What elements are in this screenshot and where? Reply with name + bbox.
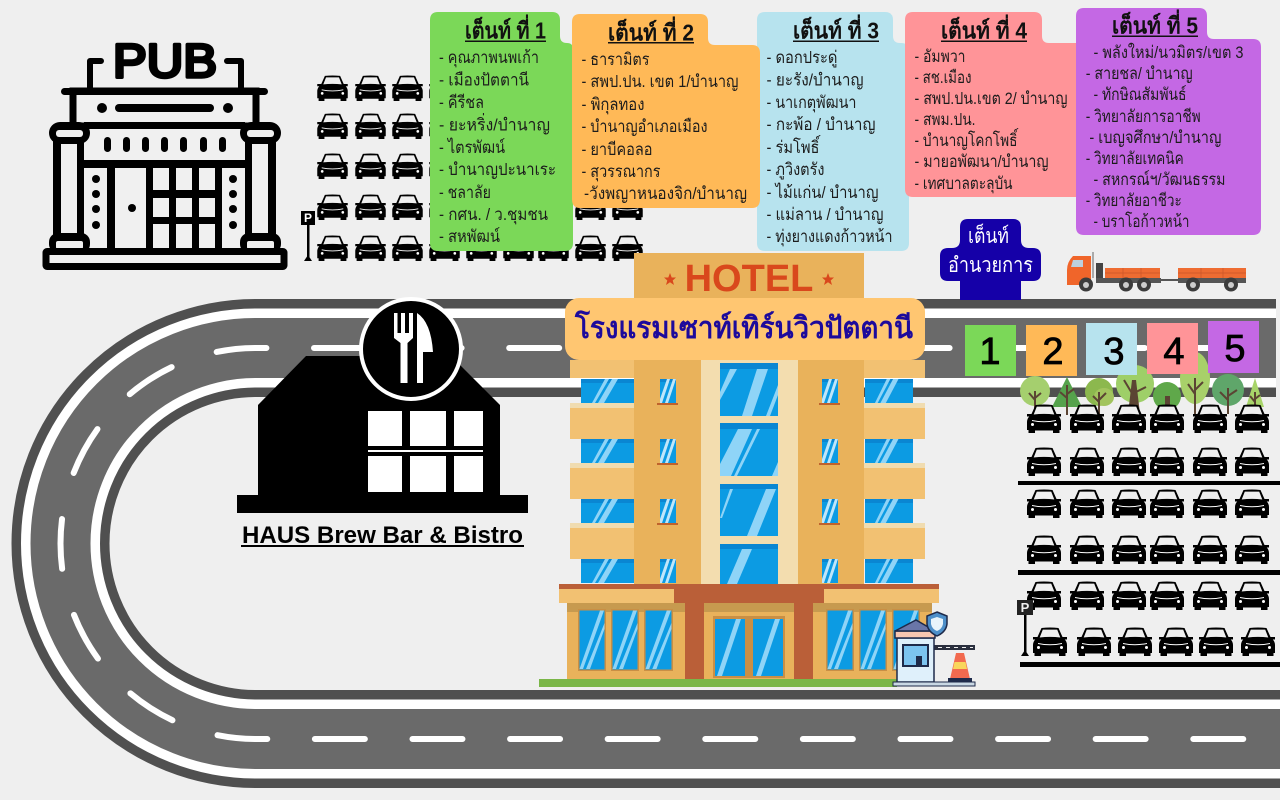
heading: tent 3: เต็นท์ ที่ 3 xyxy=(793,14,879,44)
list: tent 5: - เบญจศึกษา/บำนาญ xyxy=(1089,128,1221,147)
list: tent 3: - ยะรัง/บำนาญ xyxy=(766,70,864,90)
icon: guard booth xyxy=(893,612,975,686)
list: tent 5: - สายชล/ บำนาญ xyxy=(1086,64,1193,83)
list: tent 4: - สพป.ปน.เขต 2/ บำนาญ xyxy=(914,89,1068,108)
list: tent 5: - วิทยาลัยเทคนิค xyxy=(1086,149,1184,168)
icon: truck xyxy=(1067,252,1246,292)
icon: restaurant HAUS xyxy=(237,299,528,513)
list: tent 5: - พลังใหม่/นวมิตร/เขต 3 xyxy=(1094,42,1244,62)
hotel sign: HOTEL xyxy=(685,258,813,300)
list: tent 1: - เมืองปัตตานี xyxy=(439,70,529,90)
list: tent 4: - เทศบาลตะลุบัน xyxy=(914,174,1013,194)
list: tent 2: - บำนาญอำเภอเมือง xyxy=(582,117,708,136)
heading: tent 4: เต็นท์ ที่ 4 xyxy=(941,14,1027,44)
hotel name banner: โรงแรมเซาท์เทิร์นวิวปัตตานี xyxy=(574,309,913,345)
heading: tent 5: เต็นท์ ที่ 5 xyxy=(1112,8,1198,38)
tile 2: 2 xyxy=(1042,331,1064,373)
panel: tent 5 xyxy=(1076,8,1261,235)
list: tent 2: - สพป.ปน. เขต 1/บำนาญ xyxy=(582,72,738,91)
list: tent 2: - ธารามิตร xyxy=(582,50,650,69)
icon: left parking sign: P xyxy=(304,211,312,225)
pub sign text: PUB xyxy=(113,34,217,87)
list: tent 3: - นาเกตุพัฒนา xyxy=(766,93,856,113)
icon: hotel building xyxy=(539,360,939,687)
list: tent 1: - ไตรพัฒน์ xyxy=(439,137,505,157)
icon: star right xyxy=(822,273,834,285)
list: tent 1: - ยะหริ่ง/บำนาญ xyxy=(439,112,550,134)
list: tent 4: - สช.เมือง xyxy=(914,68,972,87)
icon: right parking sign xyxy=(1017,600,1033,656)
list: tent 3 xyxy=(766,48,892,247)
panel: tent 4 xyxy=(905,12,1079,197)
icon: star left xyxy=(664,273,676,285)
list: tent 1: - คีรีชล xyxy=(439,93,484,112)
list: tent 5: - ทักษิณสัมพันธ์ xyxy=(1094,85,1186,104)
list: tent 2: - ยาบีคอลอ xyxy=(582,140,652,159)
left car park xyxy=(317,75,643,261)
list: tent 3: - ภูวิงตรัง xyxy=(766,160,824,180)
trees xyxy=(1020,352,1264,415)
list: tent 4 xyxy=(914,47,1068,194)
heading: tent 2: เต็นท์ ที่ 2 xyxy=(608,16,694,46)
tile 1 xyxy=(965,325,1016,376)
right car park xyxy=(1018,404,1280,667)
list: tent 3: - ทุ่งยางแดงก้าวหน้า xyxy=(766,227,892,247)
panel: tent 2 xyxy=(572,14,760,208)
list: tent 3: - แม่ลาน / บำนาญ xyxy=(766,205,884,224)
list: tent 1 xyxy=(439,48,556,246)
list: tent 5 xyxy=(1086,42,1244,231)
tile 3 xyxy=(1086,323,1137,375)
tent number tiles xyxy=(965,321,1259,376)
list: tent 3: - ร่มโพธิ์ xyxy=(766,135,821,157)
list: tent 1: - คุณภาพนพเก้า xyxy=(439,48,539,68)
heading: tent 1: เต็นท์ ที่ 1 xyxy=(465,14,546,44)
icon: pub building xyxy=(46,34,284,266)
list: tent 5: - บราโอก้าวหน้า xyxy=(1094,211,1190,231)
road track xyxy=(60,348,1280,739)
list: tent 2 xyxy=(582,50,747,203)
panel: directors tent: เต็นท์ xyxy=(968,222,1009,248)
list: tent 4: - มายอพัฒนา/บำนาญ xyxy=(914,152,1048,171)
tile 3: 3 xyxy=(1103,331,1125,373)
list: tent 2: -วังพญาหนองจิก/บำนาญ xyxy=(584,184,747,203)
list: tent 4: - บำนาญโคกโพธิ์ xyxy=(914,128,1019,150)
panel: tent 1 xyxy=(430,12,573,251)
list: tent 4: - อัมพวา xyxy=(914,47,966,66)
list: tent 5: - สหกรณ์ฯ/วัฒนธรรม xyxy=(1094,170,1226,189)
list: tent 3: - ไม้แก่น/ บำนาญ xyxy=(766,182,878,202)
list: tent 5: - วิทยาลัยการอาชีพ xyxy=(1086,107,1201,126)
tile 5: 5 xyxy=(1224,328,1246,370)
list: tent 5: - วิทยาลัยอาชีวะ xyxy=(1086,191,1182,210)
tile 5 xyxy=(1208,321,1259,373)
hotel name banner xyxy=(565,298,925,360)
panel: tent 3 xyxy=(757,12,909,251)
list: tent 1: - ชลาลัย xyxy=(439,183,491,202)
restaurant name: HAUS Brew Bar & Bistro xyxy=(242,522,523,549)
tile 1: 1 xyxy=(979,331,1001,373)
list: tent 1: - สหพัฒน์ xyxy=(439,227,500,246)
tile 4 xyxy=(1147,323,1198,374)
hotel sign xyxy=(634,253,864,300)
tile 4: 4 xyxy=(1163,331,1185,373)
panel: directors tent: อำนวยการ xyxy=(948,254,1033,277)
list: tent 2: - สุวรรณากร xyxy=(582,162,660,182)
icon: right parking sign: P xyxy=(1021,600,1030,615)
list: tent 1: - กศน. / ว.ชุมชน xyxy=(439,205,548,225)
tile 2 xyxy=(1026,325,1077,376)
panel: directors tent xyxy=(940,219,1041,300)
list: tent 3: - กะพ้อ / บำนาญ xyxy=(766,115,876,134)
list: tent 3: - ดอกประดู่ xyxy=(766,48,838,68)
list: tent 4: - สพม.ปน. xyxy=(914,110,976,129)
list: tent 2: - พิกุลทอง xyxy=(582,95,644,115)
icon: left parking sign xyxy=(301,211,315,261)
list: tent 1: - บำนาญปะนาเระ xyxy=(439,160,556,179)
